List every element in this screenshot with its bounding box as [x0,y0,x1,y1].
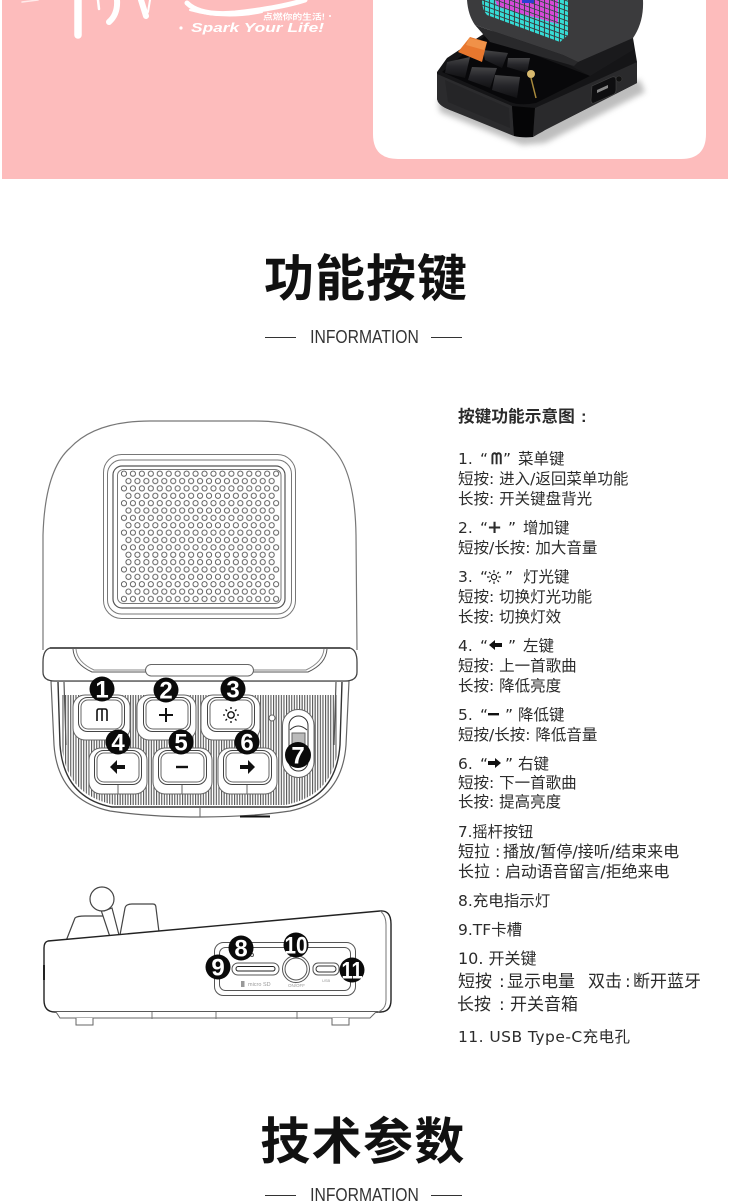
item 10: power key: 短按 [458,972,492,992]
joystick slot and charge LED [269,710,314,778]
tagline [179,12,331,35]
item 10: power key: : [499,972,505,992]
item 5: minus key: 5. [458,706,473,724]
lower body with ribbed keyboard well [51,681,349,817]
item 6: right key: 长按: 提高亮度 [458,793,561,811]
item 4: left key: 短按: 上一首歌曲 [458,657,577,675]
legend title: : [581,407,587,426]
item 2: plus key: “ [480,519,488,537]
item 5: minus key [458,706,597,744]
legend title: 按键功能示意图 [458,407,575,426]
item 10: power key: 长按 [457,995,491,1015]
gold joystick [527,70,535,78]
item 10: power key [457,949,701,1015]
item 7: joystick: 启动语音留言/拒绝来电 [505,862,669,881]
orange key [458,37,487,62]
heading: 技术参数: 技术参数 [260,1114,466,1170]
number badges 8 to 11: 9 [211,954,225,982]
subheading: INFORMATION: INFORMATION [310,327,419,347]
number badges 1 to 7: 3 [226,676,240,704]
item 1: menu key: 长按: 开关键盘背光 [458,490,592,508]
hero banner: pink panel with product [2,0,728,179]
heading: 功能按键: 功能按键 [264,251,468,307]
number badges 1 to 7: 4 [111,730,125,756]
item 7: joystick: : [495,862,500,881]
item 4: left key: 左键 [523,637,554,655]
item 3: light key [458,568,592,626]
speaker grille [104,454,296,618]
item 3: light key: 灯光键 [523,568,570,586]
item 7: joystick [458,823,679,881]
item 6: right key: 6. [458,755,473,773]
number badges 8 to 11 [206,932,364,984]
item 1: menu key: 菜单键 [518,450,565,468]
item 1: menu key: 1. [458,450,473,468]
product: Ditoo speaker [437,0,645,145]
item 2: plus key: 短按/长按: 加大音量 [458,539,597,557]
item 2: plus key: + [487,517,502,538]
item 3: light key: “ [480,568,488,586]
number badges 8 to 11: 8 [234,936,248,962]
tagline: Spark Your Life! [191,20,325,35]
side view diagram [43,886,392,1026]
item 5: minus key: “ [480,706,488,724]
neck band [43,648,357,681]
item 10: power key: 双击 [588,972,622,992]
item 4: left key: 4. [458,637,473,655]
number badges 8 to 11: 10 [284,932,308,960]
port labels [241,978,331,988]
item 10: power key: 断开蓝牙 [633,972,701,992]
item 1: menu key [458,450,628,508]
item 4: left key: “ [480,637,488,655]
number badges 8 to 11: 11 [342,958,362,984]
item 2: plus key: 增加键 [523,519,570,537]
number badges 1 to 7: 5 [174,730,188,756]
item 10: power key: : [625,972,631,992]
item 6: right key: “ [480,755,488,773]
item 1: menu key: 短按: 进入/返回菜单功能 [458,470,628,488]
item 10: power key: : [499,995,505,1015]
item 1: menu key: ᗰ [491,450,502,468]
number badges 1 to 7: 6 [240,730,254,756]
item 6: right key [458,755,577,811]
tagline: 点燃你的生活! [263,12,325,22]
speaker side body [44,911,391,1025]
item 10: power key: 显示电量 [507,972,575,992]
number badges 1 to 7: 7 [291,742,305,770]
item 9: TF slot: 9.TF卡槽 [458,921,522,939]
item 5: minus key: ” [505,706,513,724]
port panel [214,942,356,996]
item 4: left key: 长按: 降低亮度 [458,677,561,695]
item 7: joystick: 长拉 [458,862,490,881]
item 7: joystick: : [495,842,500,861]
port labels: micro SD [248,982,271,988]
number badges 1 to 7: 1 [95,676,109,704]
item 3: light key: 3. [458,568,473,586]
device head outline [43,421,357,650]
item 10: power key: 10. 开关键 [458,949,537,968]
port labels: USB [322,978,331,983]
item 10: power key: 开关音箱 [510,995,578,1015]
key function legend [457,407,701,1046]
brush lettering [22,0,305,35]
key caps and joystick [66,887,159,941]
item 5: minus key: 短按/长按: 降低音量 [458,726,597,744]
item 3: light key: 短按: 切换灯光功能 [458,588,592,606]
item 6: right key: 右键 [518,755,549,773]
keycaps [445,57,470,78]
item 11: USB port: 11. USB Type-C充电孔 [458,1028,630,1046]
item 7: joystick: 7.摇杆按钮 [458,823,533,841]
item 1: menu key: “ [480,450,488,468]
item 3: light key: 长按: 切换灯效 [458,608,561,626]
item 1: menu key: ” [503,450,511,468]
number badges 1 to 7 [90,676,311,770]
port labels: ON/OFF [288,983,305,988]
key icons [97,707,250,767]
item 5: minus key: 降低键 [518,706,565,724]
item 7: joystick: 短拉 [458,842,490,861]
white product card [373,0,706,159]
item 8: charge LED: 8.充电指示灯 [458,892,550,910]
item 2: plus key [458,517,597,557]
item 7: joystick: 播放/暂停/接听/结束来电 [503,842,679,861]
item 6: right key: 短按: 下一首歌曲 [458,774,577,792]
item 2: plus key: 2. [458,519,473,537]
front view diagram [42,420,358,818]
item 6: right key: ” [505,755,513,773]
bottom row keys [89,748,277,794]
item 2: plus key: ” [508,519,516,537]
number badges 1 to 7: 2 [159,678,173,704]
item 4: left key: ” [508,637,516,655]
item 3: light key: ” [505,568,513,586]
top row keys [73,695,260,740]
item 4: left key [458,637,577,695]
